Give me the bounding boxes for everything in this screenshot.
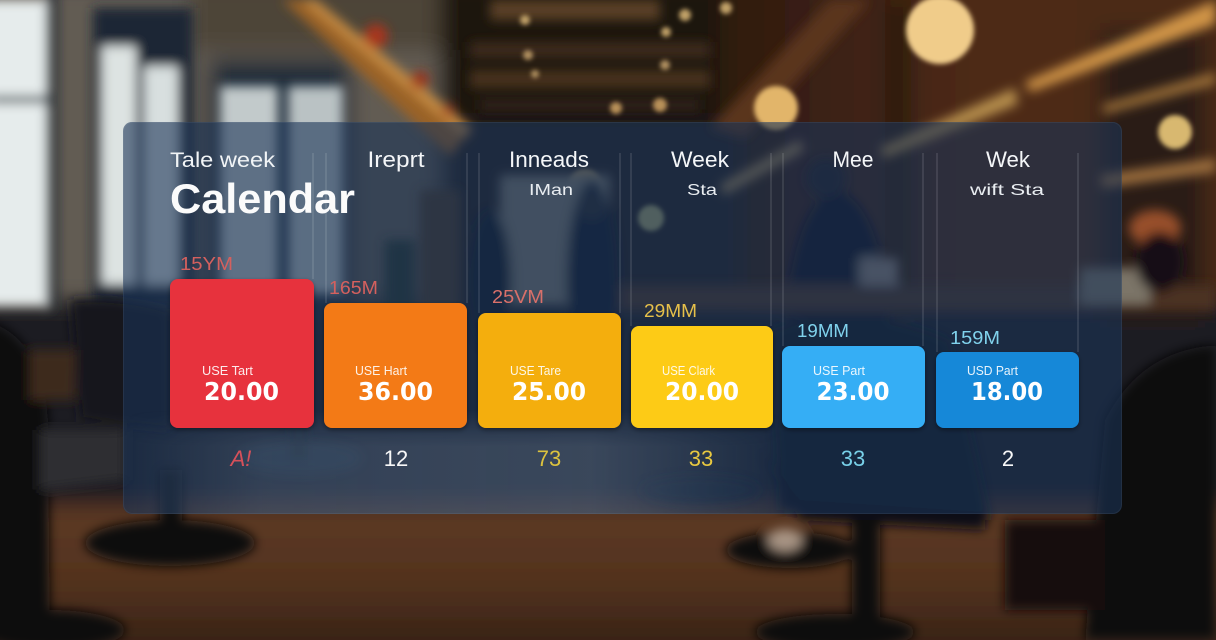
- bar 2: orange: USE Hart: [355, 364, 408, 378]
- value labels above bars: [180, 254, 1000, 348]
- column sub-labels: wift Sta: [969, 182, 1044, 199]
- bar 1: red: 20.00: [204, 377, 279, 406]
- chairs: [0, 320, 50, 640]
- bottom counts row: 73: [537, 446, 561, 471]
- bar 2: orange: [324, 303, 467, 428]
- bar 4: yellow: [631, 326, 773, 428]
- bar 5: light blue: 23.00: [816, 377, 890, 406]
- column headers: Ireprt: [368, 147, 424, 172]
- value labels above bars: 25VM: [492, 287, 544, 307]
- bottom counts row: 33: [689, 446, 713, 471]
- bar 3: amber: [478, 313, 621, 428]
- pendant lamps: [906, 0, 974, 64]
- value labels above bars: 19MM: [797, 321, 849, 341]
- bar 1: red: USE Tart: [202, 364, 254, 378]
- value labels above bars: 29MM: [644, 301, 697, 321]
- bar 6: blue: 18.00: [971, 377, 1043, 406]
- heading: subtitle: Tale week: [170, 148, 275, 172]
- bottom counts row: A!: [229, 446, 251, 471]
- value labels above bars: 165M: [329, 278, 378, 298]
- column sub-labels: [529, 182, 1044, 199]
- bar 5: light blue: USE Part: [813, 364, 866, 378]
- bar 2: orange: 36.00: [358, 377, 433, 406]
- bar 6: blue: [936, 352, 1079, 428]
- middle room and people: [500, 175, 610, 305]
- value labels above bars: 15YM: [180, 254, 233, 274]
- column headers: Inneads: [509, 147, 589, 172]
- value labels above bars: 159M: [950, 328, 1000, 348]
- bottom counts row: 33: [841, 446, 865, 471]
- column headers: Wek: [986, 147, 1031, 172]
- column headers: Week: [671, 147, 730, 172]
- bottom counts row: [229, 446, 1014, 471]
- bar 3: amber: USE Tare: [510, 364, 561, 378]
- bar 4: yellow: USE Clark: [662, 364, 716, 378]
- column headers: [368, 147, 1031, 172]
- bar 4: yellow: 20.00: [665, 377, 739, 406]
- bar 5: light blue: [782, 346, 925, 428]
- column sub-labels: IMan: [529, 182, 573, 199]
- column headers: Mee: [832, 147, 874, 172]
- bar 6: blue: USD Part: [967, 364, 1019, 378]
- bar 3: amber: 25.00: [512, 377, 586, 406]
- bar 1: red: [170, 279, 314, 428]
- column sub-labels: Sta: [687, 182, 717, 199]
- bottom counts row: 12: [384, 446, 408, 471]
- panel: translucent calendar card: [123, 122, 1122, 514]
- heading: Calendar: Calendar: [170, 175, 355, 222]
- bottom counts row: 2: [1002, 446, 1014, 471]
